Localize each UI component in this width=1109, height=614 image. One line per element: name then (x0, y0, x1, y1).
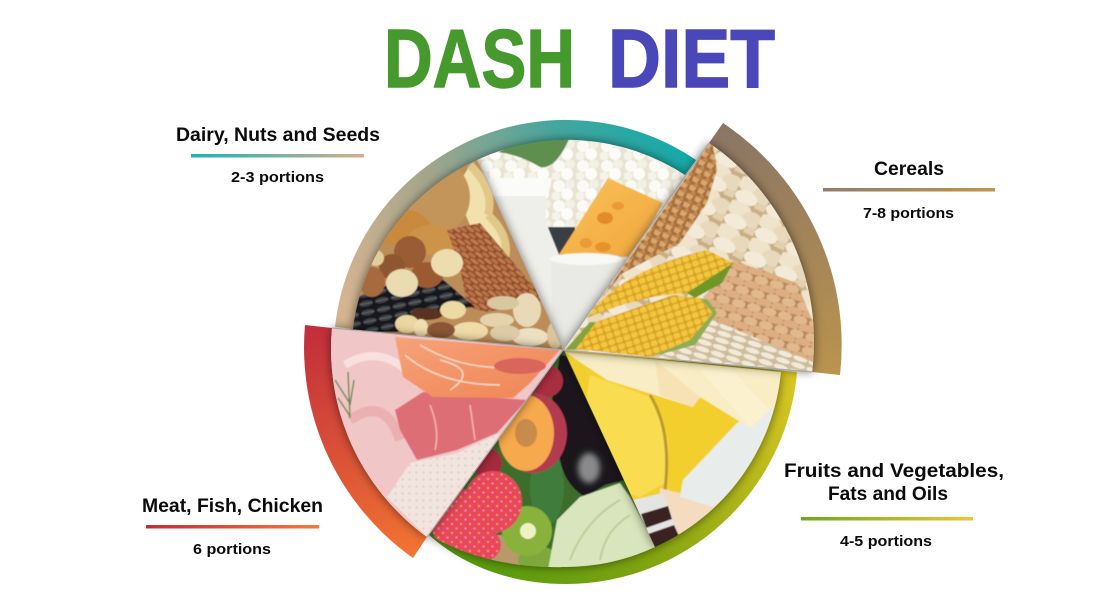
label: fruits and vegetables, fats and oils: Fruits and Vegetables, (784, 461, 1004, 482)
slice dividers (332, 143, 812, 537)
corn cob lower (565, 295, 717, 357)
corn cob upper (587, 250, 733, 318)
brazil nuts (395, 301, 488, 340)
label: cereals (823, 159, 995, 222)
slice: cereals (560, 135, 820, 380)
sunflower seeds (350, 277, 475, 332)
cheese (558, 178, 663, 257)
strawberries (431, 471, 522, 563)
dark plate (545, 227, 575, 257)
flax seeds (447, 223, 545, 312)
ring: dairy (335, 120, 696, 350)
basil (498, 137, 570, 167)
plum half (498, 393, 567, 473)
red meat (395, 392, 527, 460)
tan background (658, 487, 719, 535)
slice: fats and oils (560, 345, 790, 560)
label: meat, fish, chicken: Meat, Fish, Chicken (142, 496, 323, 517)
slice: dairy (470, 130, 700, 355)
label: fruits and vegetables, fats and oils (784, 461, 1004, 550)
rice (663, 320, 813, 371)
label: cereals: Cereals (874, 159, 944, 180)
buckwheat (600, 140, 717, 300)
label: dairy, nuts and seeds: Dairy, Nuts and Seeds (176, 125, 380, 146)
glass (680, 406, 775, 508)
label: meat, fish, chicken (142, 496, 323, 558)
label: fruits and vegetables, fats and oils: 4-5 portions (840, 533, 932, 550)
pistachios (480, 293, 563, 349)
lentils (703, 260, 815, 368)
rosemary (335, 372, 354, 418)
pale nuts (463, 168, 502, 249)
ring: fruits and vegetables (428, 350, 797, 584)
ring: cereals (709, 123, 842, 375)
hazelnuts (359, 236, 463, 297)
label: meat, fish, chicken: 6 portions (193, 541, 271, 558)
title: DIET (608, 12, 775, 105)
title: DASH (384, 12, 575, 105)
kiwi (490, 505, 553, 567)
slice: fruits and vegetables (426, 350, 658, 574)
cabbage (548, 483, 658, 570)
zucchini (530, 460, 564, 524)
bottle neck (633, 493, 680, 550)
label: dairy, nuts and seeds (176, 125, 380, 186)
butter (565, 352, 785, 428)
title (384, 12, 775, 105)
slice: nuts and seeds (340, 150, 565, 355)
label: dairy, nuts and seeds: 2-3 portions (231, 169, 324, 186)
eggplant (552, 355, 625, 497)
ring: meat (304, 325, 427, 558)
label: fruits and vegetables, fats and oils: Fats and Oils (828, 484, 948, 505)
oil bottle (585, 375, 668, 497)
salmon (395, 337, 560, 398)
chicken (387, 433, 500, 537)
walnut (412, 173, 470, 228)
label: cereals: 7-8 portions (863, 205, 954, 222)
dark plum (472, 365, 563, 478)
milk glass front (550, 253, 625, 352)
slice: meat, fish, chicken (325, 320, 565, 545)
milk glass (486, 180, 560, 324)
